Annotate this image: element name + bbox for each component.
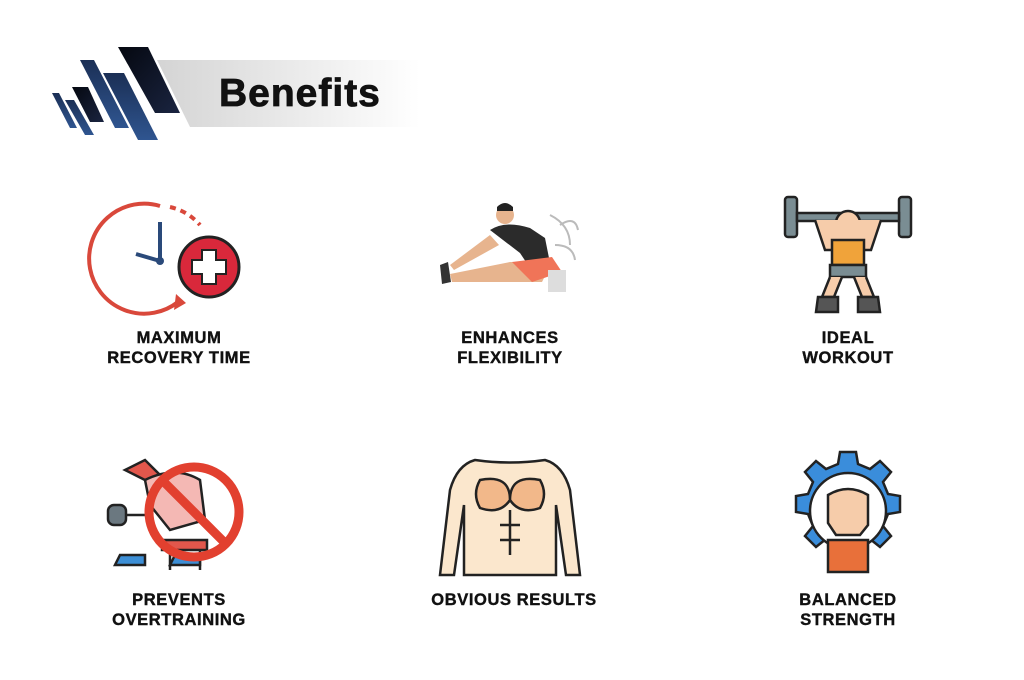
label: maximum recovery time: RECOVERY TIME (107, 349, 251, 367)
icon: obvious results torso (440, 460, 580, 575)
label: balanced strength: STRENGTH (800, 611, 896, 629)
icon: recovery clock (89, 204, 239, 314)
label: ideal workout: WORKOUT (802, 349, 894, 367)
label: balanced strength (799, 591, 897, 629)
icon: balanced strength gear (796, 452, 900, 572)
icon: prevents overtraining (108, 460, 239, 570)
label: balanced strength: BALANCED (799, 591, 897, 609)
label: prevents overtraining (112, 591, 246, 629)
icon: flexibility stretch (440, 203, 578, 292)
label: enhances flexibility: FLEXIBILITY (457, 349, 563, 367)
title: Benefits (219, 72, 381, 115)
label: enhances flexibility (457, 329, 563, 367)
label: maximum recovery time (107, 329, 251, 367)
label: maximum recovery time: MAXIMUM (137, 329, 221, 347)
label: ideal workout (802, 329, 894, 367)
label: prevents overtraining: PREVENTS (132, 591, 226, 609)
icon: ideal workout (785, 197, 911, 312)
label: obvious results: OBVIOUS RESULTS (431, 591, 597, 609)
label: prevents overtraining: OVERTRAINING (112, 611, 246, 629)
label: ideal workout: IDEAL (822, 329, 874, 347)
header logo (52, 47, 420, 140)
label: enhances flexibility: ENHANCES (461, 329, 559, 347)
